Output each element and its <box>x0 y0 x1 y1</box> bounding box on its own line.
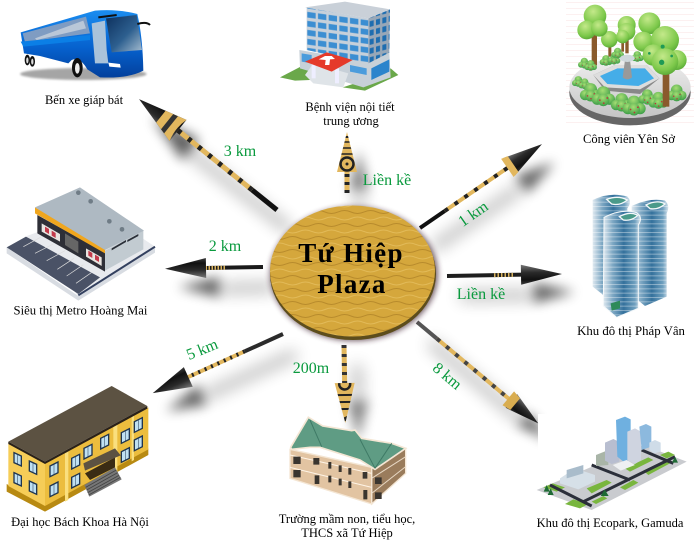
icon: school <box>290 417 406 504</box>
distance label: 5 km: 5 km <box>184 336 221 364</box>
icon: hospital <box>280 2 398 91</box>
distance label: 8 km: 8 km <box>429 360 465 394</box>
icon: university building <box>7 386 148 512</box>
distance label: adjacent right: Liền kề <box>457 286 505 303</box>
label: Phap Van: Khu đô thị Pháp Vân <box>577 324 686 338</box>
icon: Ecopark urban area <box>537 417 687 510</box>
white backing of Ecopark image <box>538 414 700 526</box>
label: school: Trường mầm non, tiểu học, <box>279 512 415 526</box>
distance label: 200m: 200m <box>293 360 330 377</box>
arrow: adjacent to Phap Van <box>447 264 562 286</box>
arrow: 200 m to school <box>334 345 355 423</box>
label: hospital: Bệnh viện nội tiết <box>305 100 395 114</box>
icon: Metro supermarket <box>7 187 155 301</box>
label: hospital: trung ương <box>323 114 379 128</box>
label: bus station: Bến xe giáp bát <box>45 93 124 107</box>
distance label: adjacent top: Liền kề <box>363 172 411 189</box>
title: Tứ Hiệp <box>298 238 404 268</box>
label: park: Công viên Yên Sở <box>583 132 675 146</box>
distance label: 2 km: 2 km <box>209 238 242 255</box>
title <box>298 238 404 299</box>
arrow: 8 km to Ecopark <box>411 315 544 430</box>
distance label: 1 km: 1 km <box>455 198 492 231</box>
label: Metro: Siêu thị Metro Hoàng Mai <box>14 304 148 318</box>
icon: park with fountain <box>566 3 694 125</box>
label: hospital <box>305 100 395 128</box>
label: school: THCS xã Tứ Hiệp <box>301 526 393 540</box>
arrow: 3 km to bus station <box>131 89 285 221</box>
arrow: 2 km to Metro <box>165 257 263 279</box>
label: Ecopark: Khu đô thị Ecopark, Gamuda <box>537 516 684 530</box>
back tower right <box>632 200 668 306</box>
arrow head shadows <box>152 117 575 441</box>
arrow shaft shadows <box>185 148 534 421</box>
arrow: 5 km to university <box>148 324 287 403</box>
arrow: 1 km to park <box>414 135 548 237</box>
back tower left <box>593 195 630 295</box>
front tower <box>603 211 640 317</box>
icon: apartment towers <box>593 195 668 317</box>
arrow: adjacent to hospital <box>337 132 357 193</box>
center disc: Tu Hiep Plaza <box>270 206 438 341</box>
label: university: Đại học Bách Khoa Hà Nội <box>11 515 149 529</box>
distance label: 3 km: 3 km <box>224 143 257 160</box>
title: Plaza <box>317 269 387 299</box>
label: school <box>279 512 415 540</box>
icon: bus <box>20 10 150 80</box>
